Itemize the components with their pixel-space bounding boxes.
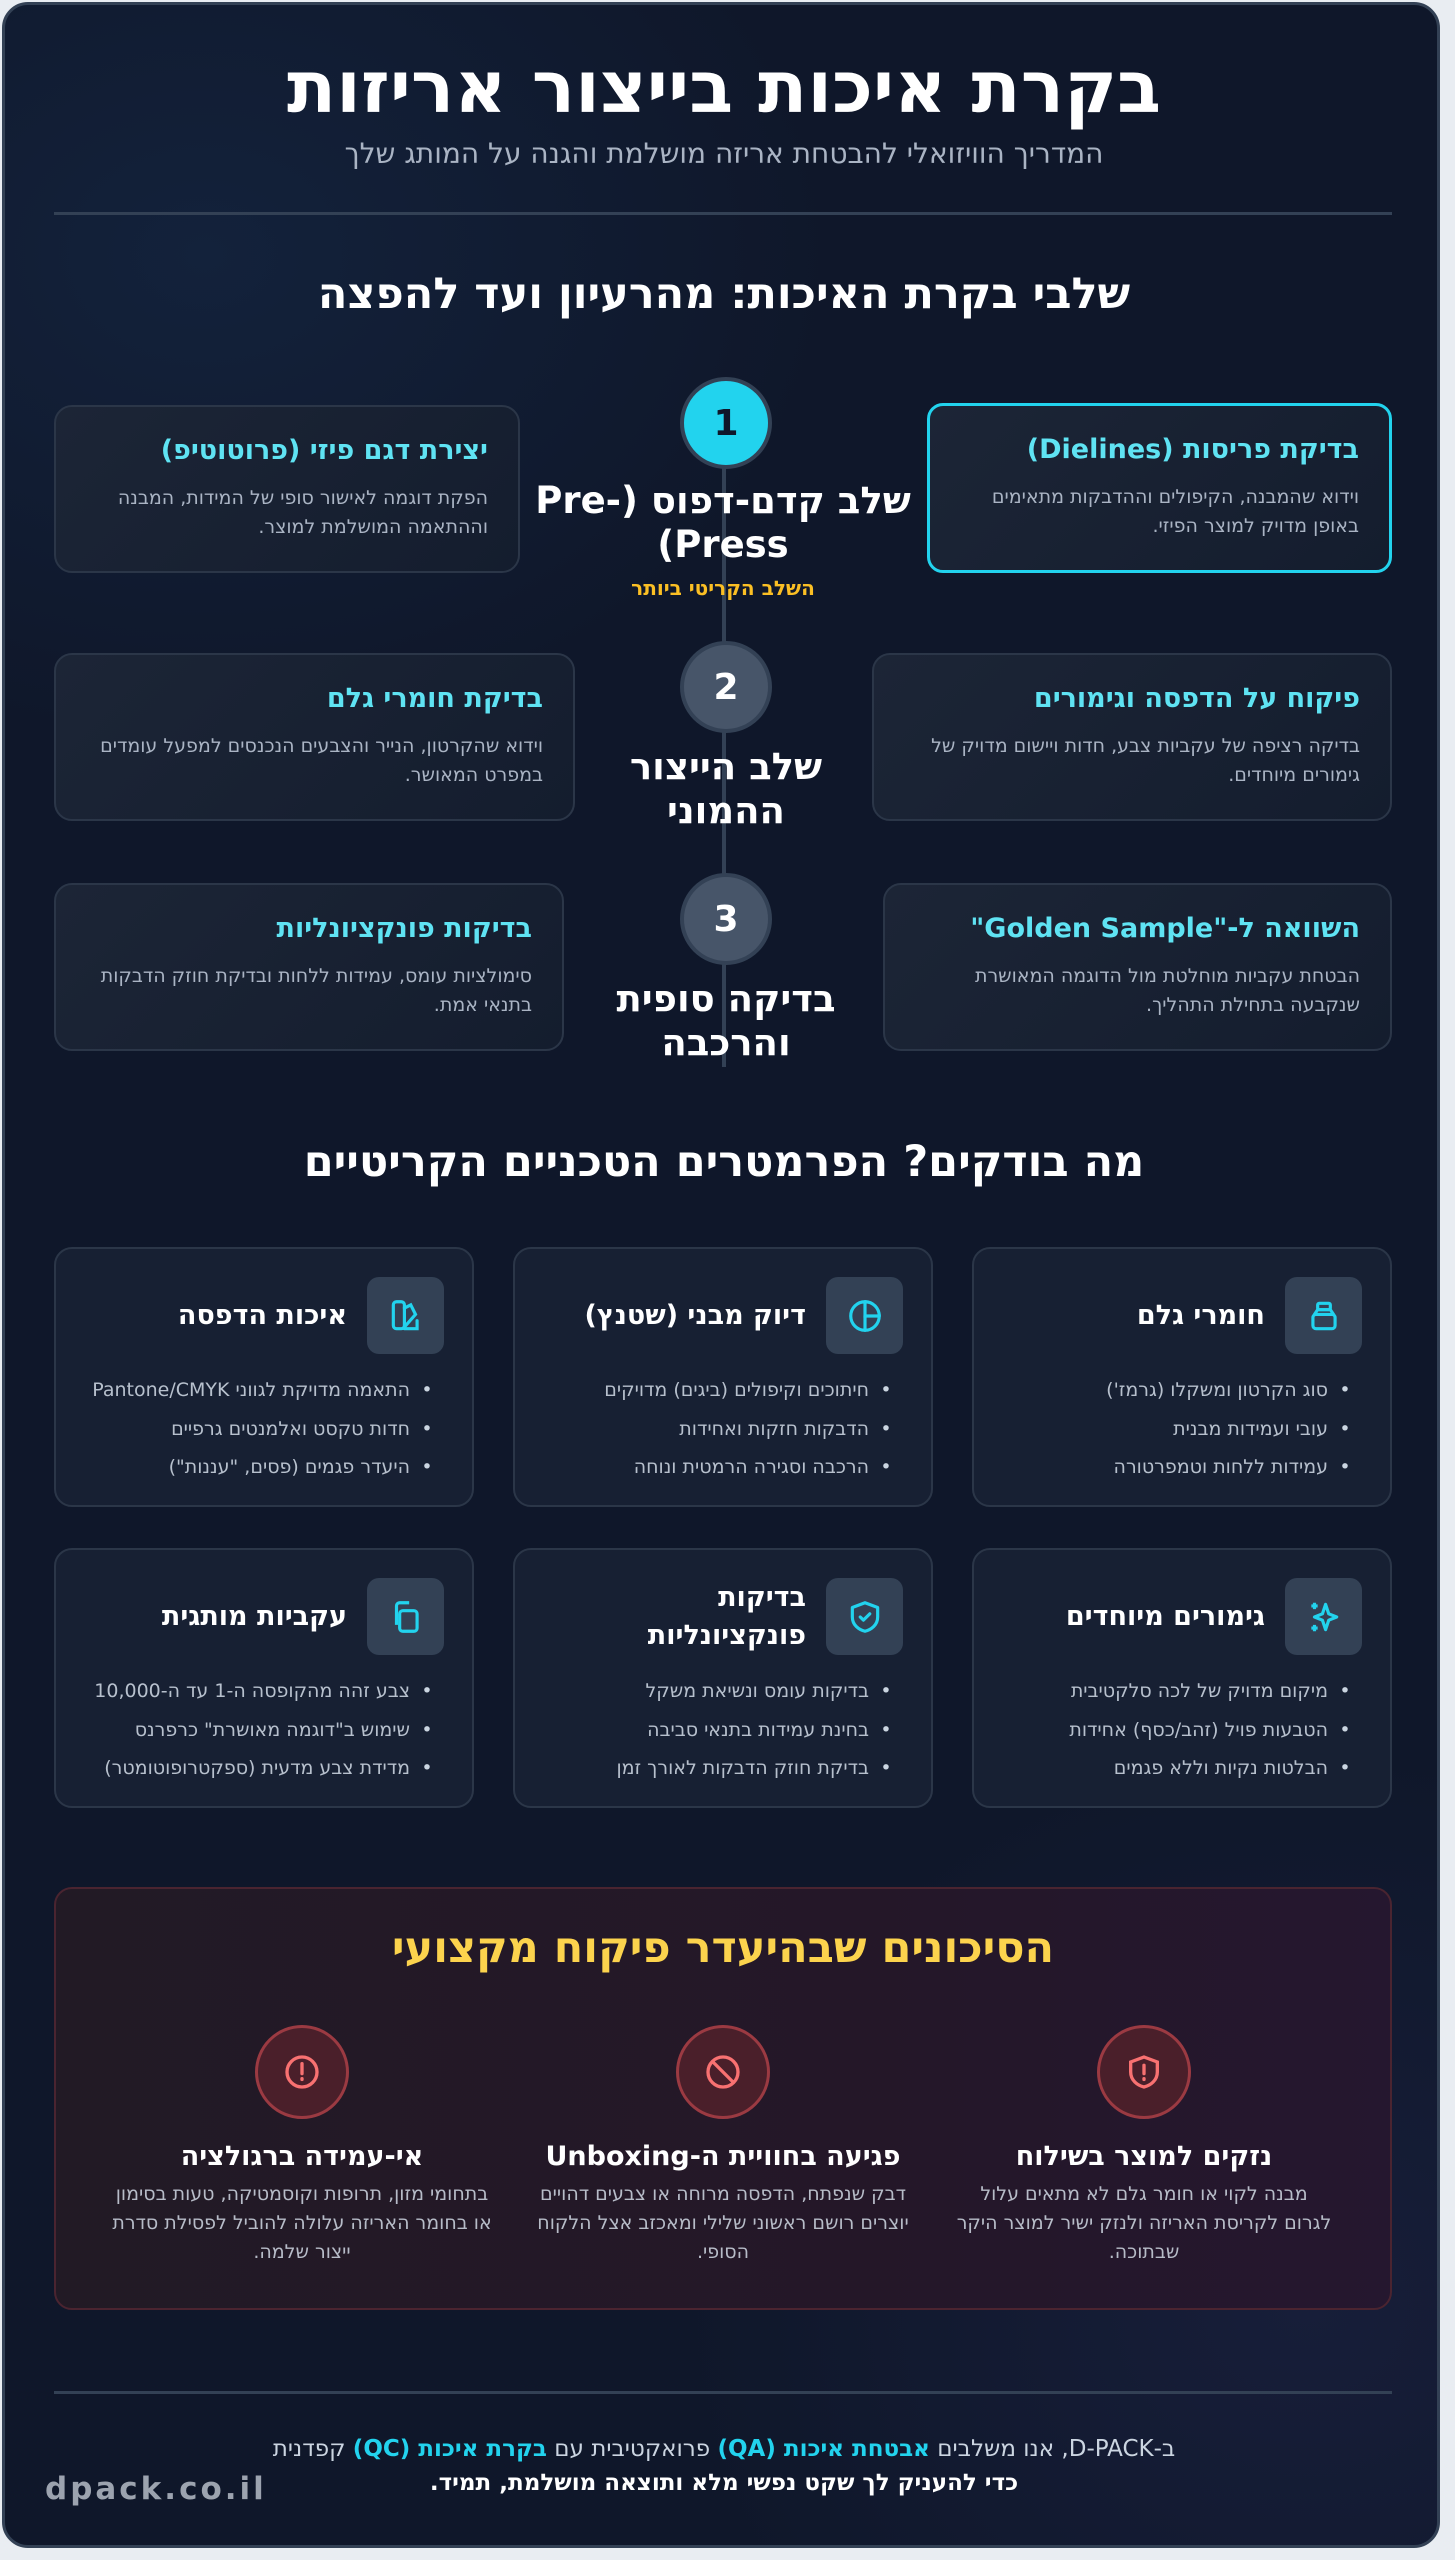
card: dielines: בדיקת פריסות (Dielines)	[1027, 434, 1359, 465]
step 3 circle	[680, 873, 772, 965]
param: structure: חיתוכים וקיפולים (ביגים) מדויקים	[604, 1379, 869, 1401]
card: dielines: וידוא שהמבנה, הקיפולים וההדבקות מתאימים באופן מדויק למוצר הפיזי.	[992, 486, 1359, 537]
param: finishes: הבלטות נקיות וללא פגמים	[1114, 1757, 1328, 1779]
param: functional tests: בדיקת חוזק הדבקות לאורך זמן	[616, 1757, 869, 1779]
param: raw materials	[972, 1247, 1392, 1507]
param: print quality: התאמה מדויקת לגווני Pantone/CMYK	[92, 1379, 410, 1401]
icon: shield alert	[1097, 2025, 1191, 2119]
stage 3 label: בדיקה סופית והרכבה	[616, 977, 836, 1064]
param: brand consistency: שימוש ב"דוגמה מאושרת" כרפרנס	[135, 1718, 410, 1740]
card: dielines	[927, 403, 1392, 573]
step 3 circle: 3	[713, 898, 739, 940]
risk: regulation: אי-עמידה ברגולציה	[181, 2141, 423, 2172]
heading: parameters: מה בודקים? הפרמטרים הטכניים הקריטיים	[304, 1137, 1144, 1187]
param: print quality: חדות טקסט ואלמנטים גרפיים	[171, 1418, 410, 1440]
card: functional: סימולציות עומס, עמידות ללחות ובדיקת חוזק הדבקות בתנאי אמת.	[101, 965, 532, 1016]
card: prototype: יצירת דגם פיזי (פרוטוטיפ)	[161, 435, 488, 466]
card: golden sample	[883, 883, 1392, 1051]
card: raw materials	[54, 653, 575, 821]
footer text: ב-D-PACK, אנו משלבים אבטחת איכות (QA) פרואקטיבית עם בקרת איכות (QC) קפדנית	[273, 2436, 1175, 2462]
subtitle: המדריך הוויזואלי להבטחת אריזה מושלמת והגנה על המותג שלך	[345, 137, 1103, 170]
timeline line	[722, 430, 726, 1067]
param: brand consistency	[54, 1548, 474, 1808]
risk: regulation	[112, 2025, 492, 2263]
card: raw materials: בדיקת חומרי גלם	[327, 683, 543, 714]
param: raw materials: חומרי גלם	[1137, 1300, 1265, 1330]
card: golden sample: השוואה ל-"Golden Sample"	[970, 913, 1360, 944]
risk: shipping damage: מבנה לקוי או חומר גלם לא מתאים עלול לגרום לקריסת האריזה ולנזק ישיר למוצר היקר שבתוכה.	[957, 2183, 1331, 2263]
param: finishes: גימורים מיוחדים	[1066, 1600, 1265, 1632]
step 2 circle	[680, 641, 772, 733]
param: brand consistency: צבע זהה מהקופסה ה-1 עד ה-10,000	[94, 1680, 410, 1702]
card: prototype: הפקת דוגמה לאישור סופי של המידות, המבנה וההתאמה המושלמת למוצר.	[118, 487, 488, 538]
icon: ban	[676, 2025, 770, 2119]
footer text	[272, 2436, 1175, 2496]
param: structure: דיוק מבני (שטנץ)	[584, 1300, 806, 1330]
param: functional tests	[513, 1548, 933, 1808]
risks heading: הסיכונים שבהיעדר פיקוח מקצועי	[392, 1923, 1054, 1973]
risk: shipping damage: נזקים למוצר בשילוח	[1016, 2141, 1272, 2172]
title: בקרת איכות בייצור אריזות	[287, 45, 1161, 129]
risk: shipping damage	[957, 2025, 1331, 2263]
card: print supervision	[872, 653, 1392, 821]
footer text: כדי להעניק לך שקט נפשי מלא ותוצאה מושלמת, תמיד.	[430, 2470, 1018, 2496]
param: structure: הדבקות חזקות ואחידות	[679, 1418, 869, 1440]
param: functional tests: בדיקות עומס ונשיאת משקל	[645, 1680, 869, 1702]
param: finishes: הטבעות פויל (זהב/כסף) אחידות	[1069, 1718, 1328, 1740]
param: brand consistency: עקביות מותגית	[162, 1600, 347, 1632]
param: finishes: מיקום מדויק של לכה סלקטיבית	[1071, 1680, 1328, 1702]
icon: sparkle	[1285, 1578, 1362, 1655]
risk: regulation: בתחומי מזון, תרופות וקוסמטיקה, טעות בסימון או בחומר האריזה עלולה להוביל לפסילת סדרת ייצור שלמה.	[112, 2183, 492, 2263]
card: golden sample: הבטחת עקביות מוחלטת מול הדוגמה המאושרת שנקבעה בתחילת התהליך.	[975, 965, 1360, 1016]
step 2 circle: 2	[713, 666, 739, 708]
step 1 circle: 1	[713, 402, 739, 444]
card: prototype	[54, 405, 520, 573]
icon: copies	[367, 1578, 444, 1655]
panel: risks	[54, 1887, 1392, 2310]
param: structure: הרכבה וסגירה הרמטית ונוחה	[634, 1456, 869, 1478]
risk: unboxing: פגיעה בחוויית ה-Unboxing	[545, 2141, 900, 2172]
card: raw materials: וידוא שהקרטון, הנייר והצבעים הנכנסים למפעל עומדים במפרט המאושר.	[100, 735, 543, 786]
risk: unboxing	[537, 2025, 909, 2263]
card: print supervision: פיקוח על הדפסה וגימורים	[1034, 683, 1360, 714]
icon: swatch	[367, 1277, 444, 1354]
icon: jar	[1285, 1277, 1362, 1354]
param: print quality: איכות הדפסה	[178, 1300, 347, 1330]
stage 1 label: שלב קדם-דפוס (Pre-Press)	[535, 479, 911, 566]
card: functional	[54, 883, 564, 1051]
card: print supervision: בדיקה רציפה של עקביות צבע, חדות ויישום מדויק של גימורים מיוחדים.	[931, 735, 1360, 786]
stage 1 label: השלב הקריטי ביותר	[631, 576, 815, 600]
risk: unboxing: דבק שנפתח, הדפסה מרוחה או צבעים דהויים יוצרים רושם ראשוני שלילי ומאכזב אצל הלקוח הסופי.	[537, 2183, 909, 2263]
param: functional tests: בחינת עמידות בתנאי סביבה	[647, 1718, 869, 1740]
card: functional: בדיקות פונקציונליות	[276, 913, 532, 944]
brand url: dpack.co.il	[45, 2471, 267, 2507]
param: finishes	[972, 1548, 1392, 1808]
heading: stages: שלבי בקרת האיכות: מהרעיון ועד להפצה	[318, 269, 1130, 319]
stage 2 label: שלב הייצור ההמוני	[630, 745, 822, 832]
param: functional tests: בדיקות פונקציונליות	[648, 1582, 806, 1650]
param: print quality	[54, 1247, 474, 1507]
param: raw materials: עמידות ללחות וטמפרטורה	[1114, 1456, 1328, 1478]
icon: shield check	[826, 1578, 903, 1655]
icon: pie	[826, 1277, 903, 1354]
icon: alert circle	[255, 2025, 349, 2119]
param: print quality: היעדר פגמים (פסים, "עננות")	[169, 1456, 410, 1478]
param: brand consistency: מדידת צבע מדעית (ספקטרופוטומטר)	[104, 1757, 410, 1779]
param: structure	[513, 1247, 933, 1507]
param: raw materials: עובי ועמידות מבנית	[1173, 1418, 1328, 1440]
step 1 circle	[680, 377, 772, 469]
param: raw materials: סוג הקרטון ומשקלו (גרמז')	[1106, 1379, 1328, 1401]
